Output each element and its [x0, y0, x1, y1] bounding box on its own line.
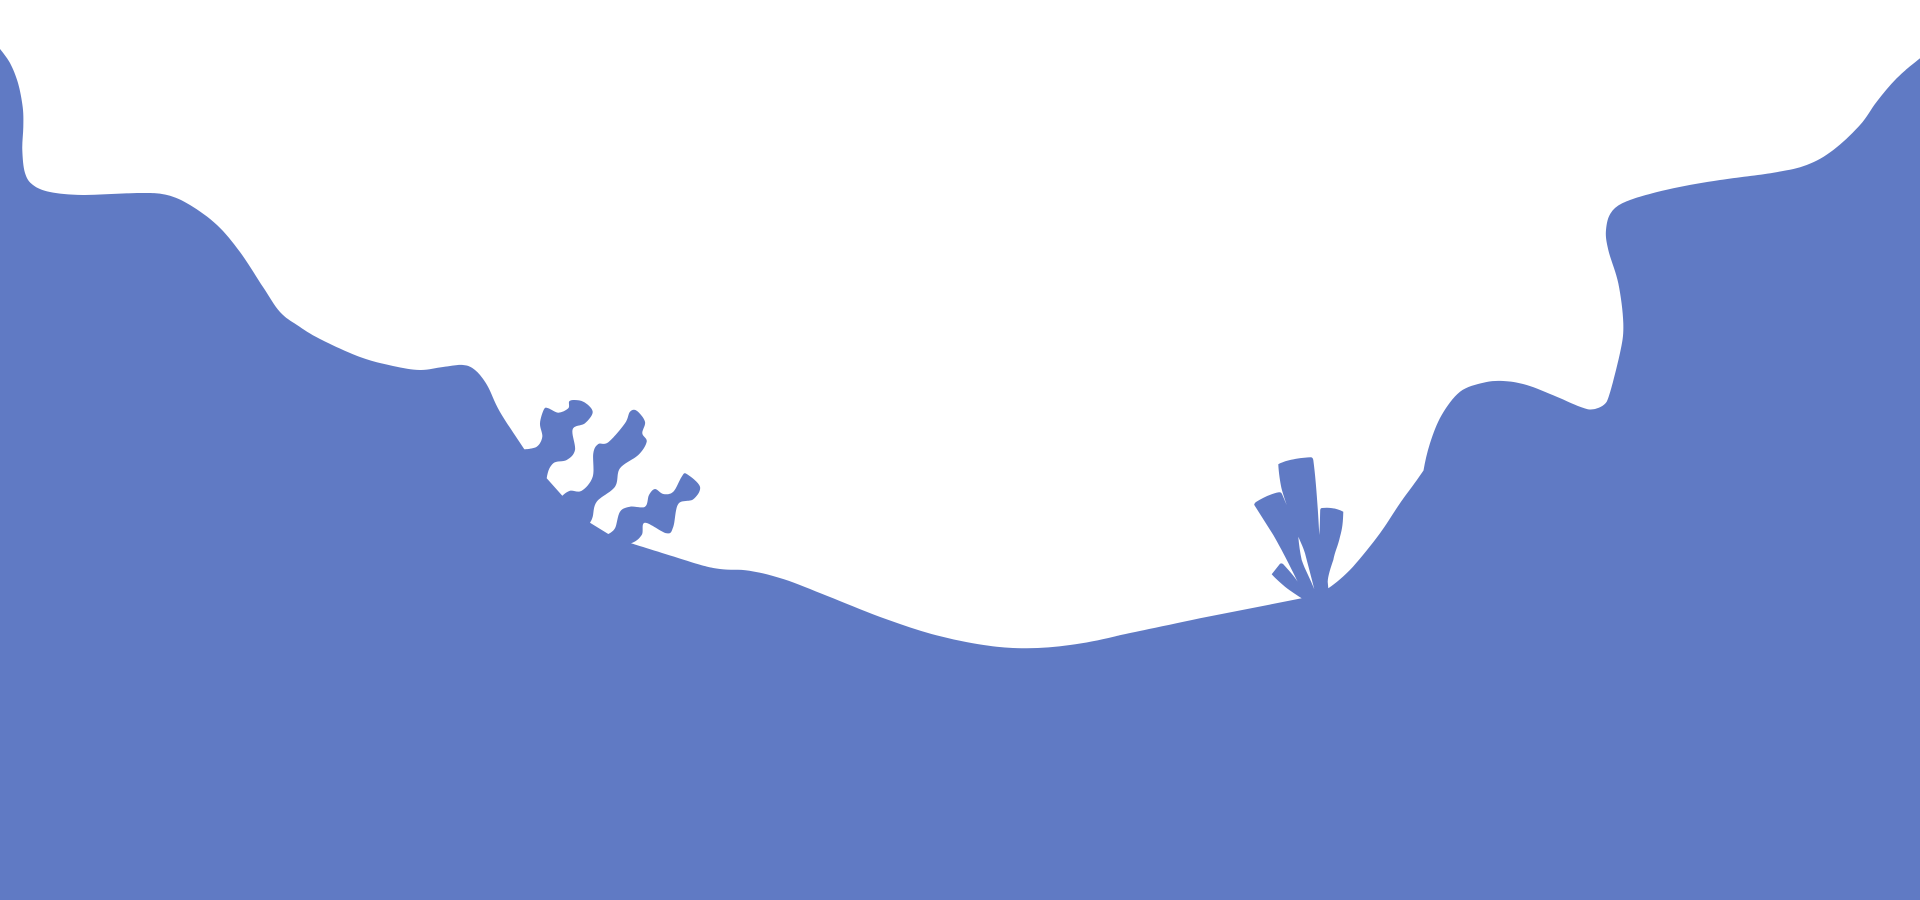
grass leaf separation sliver — [1298, 537, 1314, 589]
